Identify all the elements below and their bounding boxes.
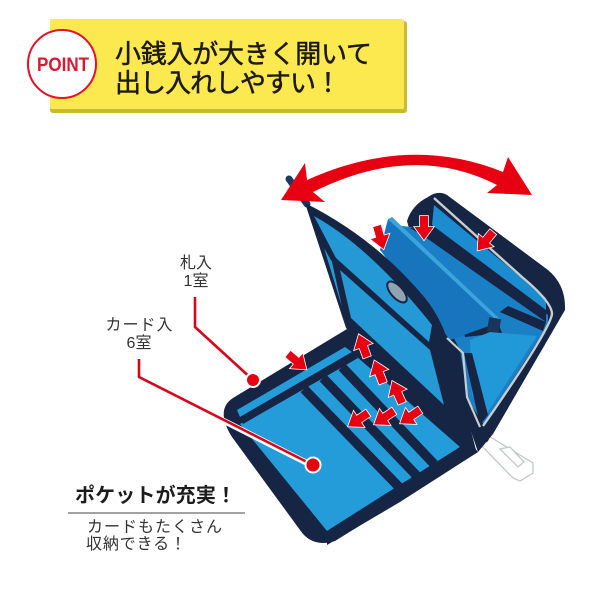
bottom card panel: [224, 329, 478, 545]
label: banknote pocket: [180, 254, 212, 290]
arrow: big double-headed opening arrow: [281, 155, 532, 202]
badge: POINT: [28, 30, 96, 98]
small red pointer arrows: [282, 216, 500, 434]
back compartment: [395, 193, 565, 452]
callout: pockets: 収納できる！: [86, 535, 186, 553]
badge: POINT: POINT: [37, 55, 89, 76]
label: card pockets: 6室: [127, 334, 151, 352]
wallet illustration: [224, 179, 565, 545]
heading: headline text: 小銭入が大きく開いて: [115, 39, 372, 69]
label: banknote pocket: 1室: [184, 272, 208, 290]
callout: pockets: [68, 483, 245, 553]
zipper pull: [478, 435, 533, 481]
callout: pockets: ポケットが充実！: [75, 483, 236, 507]
heading: headline text: [115, 39, 372, 98]
card slot dividers: [304, 367, 434, 488]
label: banknote pocket: 札入: [180, 254, 212, 272]
divider partition: [380, 217, 501, 340]
label: card pockets: [106, 317, 172, 352]
label: card pockets: カード入: [106, 317, 172, 334]
leader line: card pockets: [139, 359, 320, 472]
heading: headline text: 出し入れしやすい！: [115, 68, 341, 98]
callout: pockets: カードもたくさん: [87, 518, 222, 536]
open flap: [289, 179, 489, 453]
leader line: banknote pocket: [195, 297, 260, 387]
panel: headline banner: [28, 19, 407, 113]
